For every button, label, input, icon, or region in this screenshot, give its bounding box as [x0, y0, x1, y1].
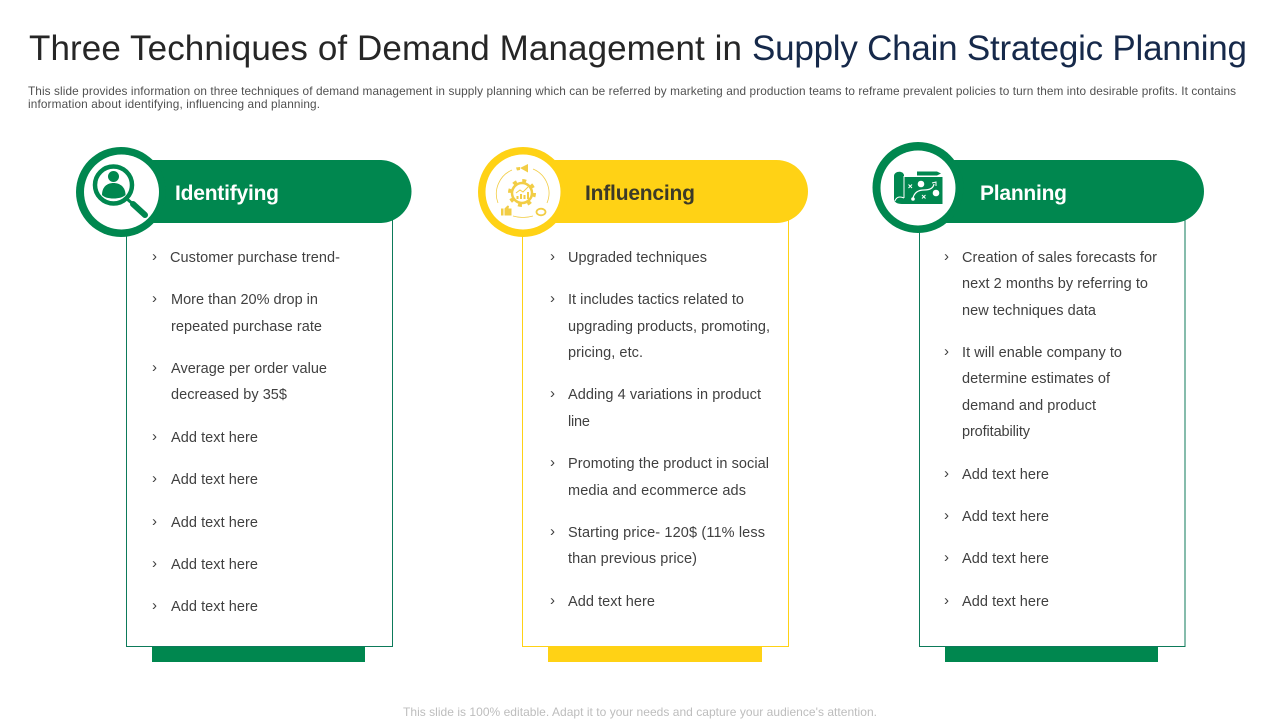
list: planning: new techniques data	[962, 303, 1097, 319]
list: identifying: ›	[152, 359, 157, 376]
list: planning: ›	[944, 248, 949, 265]
list: identifying: ›	[152, 513, 157, 530]
footer note: This slide is 100% editable. Adapt it to your needs and capture your audience's attention.	[403, 705, 877, 719]
title	[29, 29, 1247, 68]
list: planning: ›	[944, 592, 949, 609]
list: planning: profitability	[962, 424, 1031, 440]
list: planning: Add text here	[962, 467, 1049, 483]
list: influencing: ›	[550, 248, 555, 265]
list: planning: ›	[944, 549, 949, 566]
list: planning: Creation of sales forecasts for	[962, 250, 1157, 266]
list: identifying: More than 20% drop in	[171, 292, 318, 308]
list: planning: It will enable company to	[962, 345, 1122, 361]
footer bar: influencing	[548, 647, 762, 662]
list: influencing	[550, 248, 770, 610]
list: planning	[944, 248, 1157, 610]
footer bar: identifying	[152, 647, 365, 662]
list: identifying: ›	[152, 248, 157, 265]
list: planning: Add text here	[962, 509, 1049, 525]
list: influencing: ›	[550, 592, 555, 609]
list: identifying: ›	[152, 290, 157, 307]
heading: influencing: Influencing	[585, 182, 695, 205]
list: influencing: Starting price- 120$ (11% less	[568, 525, 765, 541]
list: identifying: decreased by 35$	[171, 387, 287, 403]
list: influencing: ›	[550, 454, 555, 471]
list: identifying: ›	[152, 555, 157, 572]
panel body: identifying	[126, 215, 392, 646]
list: planning: Add text here	[962, 594, 1049, 610]
icon: gear with growth chart	[478, 147, 568, 237]
list: planning: demand and product	[962, 398, 1096, 414]
list: influencing: media and ecommerce ads	[568, 483, 746, 499]
list: planning: determine estimates of	[962, 371, 1111, 387]
list: influencing: Promoting the product in social	[568, 456, 769, 472]
list: identifying: Average per order value	[171, 361, 327, 377]
list: identifying: Add text here	[171, 557, 258, 573]
list: identifying: ›	[152, 470, 157, 487]
list: identifying: Add text here	[171, 472, 258, 488]
heading: planning: Planning	[980, 182, 1067, 205]
subtitle description: information about identifying, influencing and planning.	[28, 97, 320, 111]
title: Three Techniques of Demand Management in	[29, 29, 742, 68]
title: Supply Chain Strategic Planning	[752, 29, 1247, 68]
list: influencing: ›	[550, 290, 555, 307]
header: influencing	[550, 160, 808, 223]
list: identifying: Add text here	[171, 430, 258, 446]
heading: identifying: Identifying	[175, 182, 279, 205]
list: identifying	[152, 248, 340, 615]
list: identifying: ›	[152, 597, 157, 614]
list: planning: Add text here	[962, 551, 1049, 567]
panel body: planning	[920, 215, 1185, 646]
list: influencing: It includes tactics related to	[568, 292, 744, 308]
subtitle description	[28, 84, 1236, 111]
list: planning: next 2 months by referring to	[962, 276, 1148, 292]
list: influencing: ›	[550, 523, 555, 540]
list: influencing: pricing, etc.	[568, 345, 643, 361]
list: identifying: Add text here	[171, 599, 258, 615]
list: identifying: ›	[152, 428, 157, 445]
icon: magnifier with person	[76, 147, 166, 237]
list: influencing: ›	[550, 385, 555, 402]
footer bar: planning	[945, 647, 1158, 662]
list: planning: ›	[944, 465, 949, 482]
list: influencing: Adding 4 variations in product	[568, 387, 761, 403]
list: influencing: line	[568, 414, 590, 430]
list: influencing: Add text here	[568, 594, 655, 610]
list: identifying: Customer purchase trend-	[170, 250, 340, 266]
list: influencing: Upgraded techniques	[568, 250, 707, 266]
panel: identifying	[76, 147, 412, 662]
list: identifying: Add text here	[171, 515, 258, 531]
list: influencing: than previous price)	[568, 551, 697, 567]
header: identifying	[150, 160, 412, 223]
header: planning	[945, 160, 1204, 223]
list: influencing: upgrading products, promoting,	[568, 319, 770, 335]
icon: strategy map and pencil	[872, 142, 964, 233]
panel: planning	[872, 142, 1204, 662]
list: identifying: repeated purchase rate	[171, 319, 322, 335]
list: planning: ›	[944, 343, 949, 360]
panel: influencing	[478, 147, 808, 662]
list: planning: ›	[944, 507, 949, 524]
subtitle description: This slide provides information on three techniques of demand management in supply planning which can be referred by marketing and production teams to reframe prevalent policies to turn them into desirable profits. It contains	[28, 84, 1236, 98]
panel body: influencing	[522, 215, 788, 646]
